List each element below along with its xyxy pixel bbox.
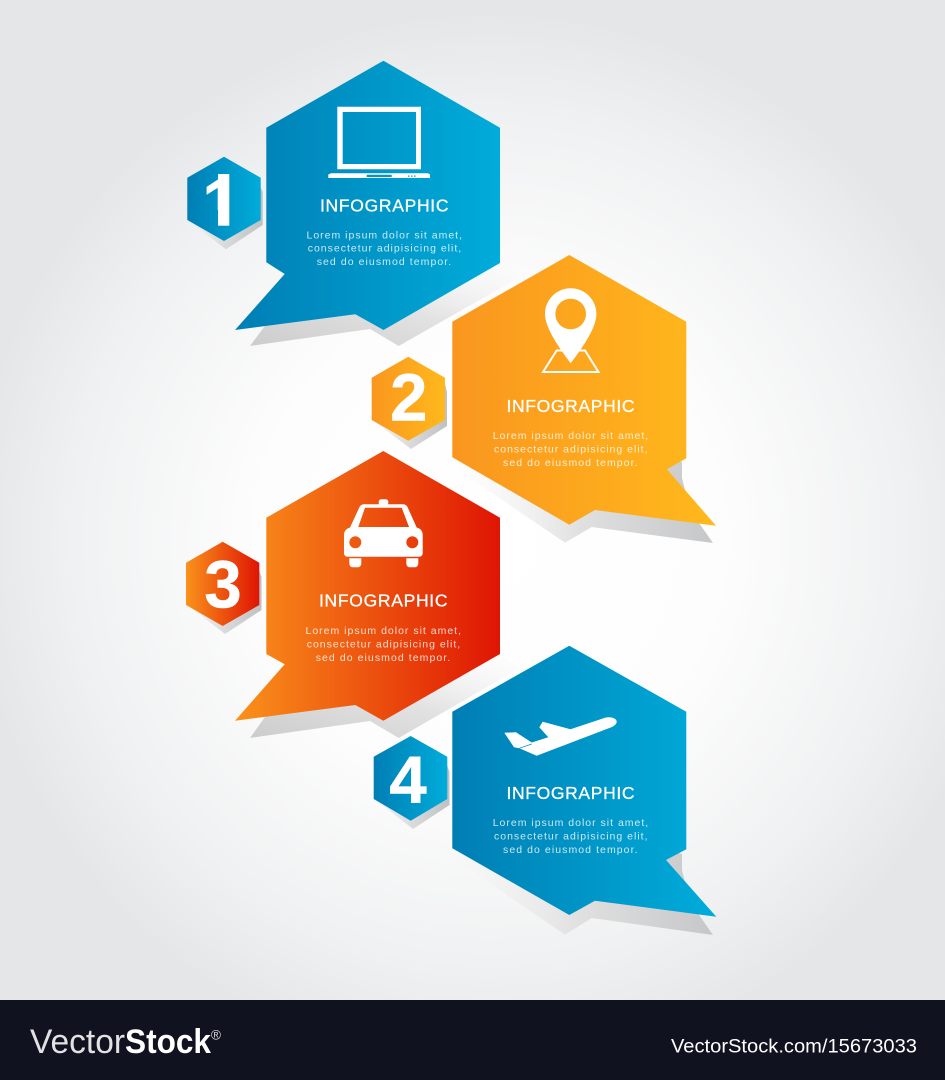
bubble shadow 3: [250, 654, 520, 738]
heading 3: INFOGRAPHIC: [319, 591, 448, 611]
registered mark: ®: [211, 1028, 221, 1042]
text block 1: consectetur adipisicing elit,: [308, 243, 461, 255]
number badge 4: [374, 736, 450, 829]
number badge 3: 3: [204, 548, 242, 622]
number badge 2: 2: [390, 360, 427, 436]
text block 1: Lorem ipsum dolor sit amet,: [306, 229, 462, 241]
speech bubble 4: [452, 646, 716, 917]
text block 4: sed do eiusmod tempor.: [503, 844, 638, 856]
icon: map pin: [543, 288, 598, 372]
heading 2: INFOGRAPHIC: [506, 396, 634, 416]
text block 4: Lorem ipsum dolor sit amet,: [493, 817, 648, 829]
icon: taxi: [344, 499, 423, 567]
text block 1: [306, 229, 462, 268]
number badge 3: [186, 542, 262, 634]
panel: step 3: [235, 451, 520, 738]
panel: step 4: [448, 646, 716, 935]
image id: VectorStock.com/15673033: [671, 1036, 917, 1058]
number badge 1: 1: [202, 166, 240, 241]
footer bar: [0, 1000, 945, 1080]
text block 4: consectetur adipisicing elit,: [494, 830, 648, 842]
text block 2: sed do eiusmod tempor.: [503, 457, 638, 469]
text block 3: sed do eiusmod tempor.: [316, 652, 450, 664]
text block 3: [306, 625, 461, 664]
text block 2: [493, 430, 648, 469]
text block 2: Lorem ipsum dolor sit amet,: [493, 430, 648, 442]
logo: Stock: [125, 1023, 211, 1061]
text block 2: consectetur adipisicing elit,: [494, 443, 648, 455]
text block 1: sed do eiusmod tempor.: [317, 256, 451, 268]
number badge 1: [187, 157, 263, 249]
bubble shadow 2: [448, 440, 713, 543]
icon: airplane: [504, 717, 617, 756]
heading 4: INFOGRAPHIC: [506, 783, 634, 803]
panel: step 1: [235, 61, 520, 346]
text block 4: [493, 817, 648, 856]
bubble shadow 1: [250, 263, 520, 346]
text block 3: consectetur adipisicing elit,: [307, 638, 460, 650]
logo: Vector: [30, 1023, 125, 1061]
speech bubble 1: [235, 61, 500, 330]
number badge 4: 4: [389, 743, 427, 818]
number badge 2: [372, 357, 447, 449]
bubble shadow 4: [448, 830, 713, 935]
speech bubble 2: [452, 255, 716, 526]
text block 3: Lorem ipsum dolor sit amet,: [306, 625, 461, 637]
icon: laptop: [328, 107, 430, 178]
panel: step 2: [448, 255, 716, 543]
speech bubble 3: [235, 451, 500, 721]
logo: [30, 1023, 211, 1061]
heading 1: INFOGRAPHIC: [320, 196, 448, 216]
